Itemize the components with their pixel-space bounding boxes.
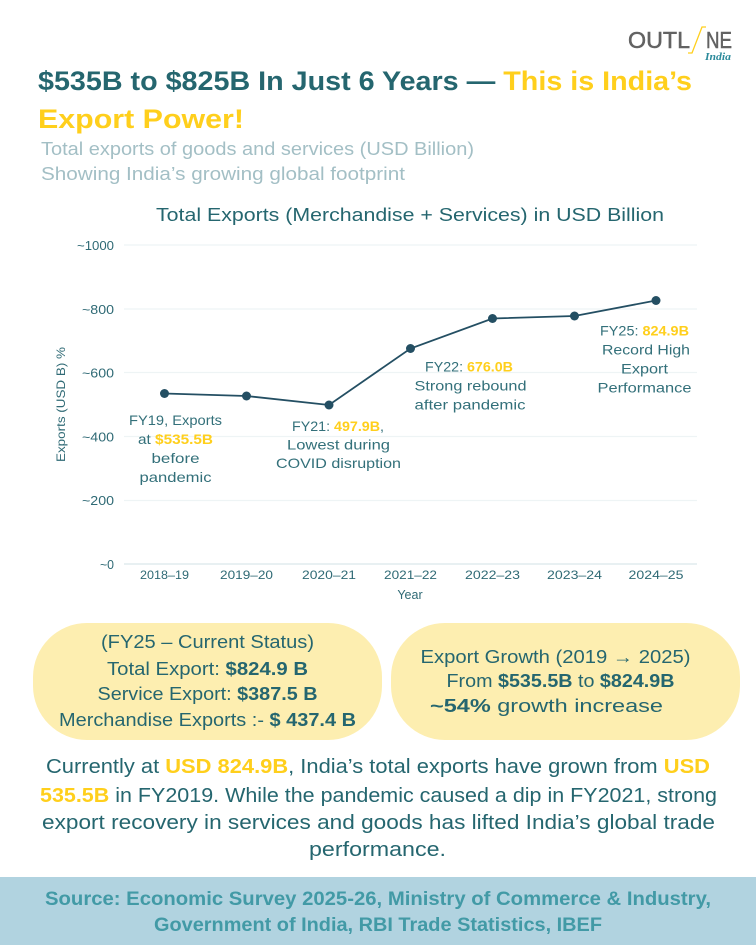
panel: FY25 current status bbox=[33, 623, 382, 740]
annotation: FY22: Strong rebound bbox=[414, 378, 526, 394]
panel: FY25 current status: Service Export: $387.5 B bbox=[98, 684, 318, 704]
x axis labels: 2021–22 bbox=[384, 568, 437, 582]
panel: export growth: Export Growth (2019 → 2025) bbox=[420, 647, 690, 667]
summary paragraph: performance. bbox=[309, 839, 446, 861]
panel: FY25 current status: Total Export: $824.9 B bbox=[107, 659, 308, 679]
annotation: FY22: after pandemic bbox=[414, 396, 526, 412]
annotation: FY21: COVID disruption bbox=[276, 455, 401, 471]
y axis labels: ~200 bbox=[82, 493, 114, 508]
summary paragraph: 535.5B in FY2019. While the pandemic caused a dip in FY2021, strong bbox=[40, 785, 717, 807]
chart title: Total Exports (Merchandise + Services) in USD Billion bbox=[156, 204, 664, 225]
subtitle: Showing India’s growing global footprint bbox=[41, 164, 405, 184]
title bbox=[38, 66, 692, 134]
x axis labels: 2023–24 bbox=[547, 568, 602, 582]
logo: Outline India bbox=[628, 27, 732, 63]
panel: FY25 current status: Merchandise Exports :- $ 437.4 B bbox=[59, 710, 356, 730]
panel: export growth: From $535.5B to $824.9B bbox=[446, 671, 674, 691]
panel: export growth: ~54% growth increase bbox=[430, 696, 663, 716]
data line bbox=[164, 300, 656, 405]
title: Export Power! bbox=[38, 104, 244, 134]
title: $535B to $825B In Just 6 Years — This is India’s bbox=[38, 66, 692, 96]
x axis labels: 2018–19 bbox=[140, 568, 189, 582]
y axis labels: ~800 bbox=[82, 302, 114, 317]
x axis labels: 2024–25 bbox=[628, 568, 684, 582]
x axis labels: 2020–21 bbox=[302, 568, 356, 582]
source footer: Government of India, RBI Trade Statistics, IBEF bbox=[154, 915, 602, 936]
x axis labels: 2022–23 bbox=[465, 568, 520, 582]
annotation: FY25 bbox=[598, 322, 692, 396]
annotation: FY22 bbox=[414, 358, 526, 412]
panel: FY25 current status: (FY25 – Current Status) bbox=[101, 632, 314, 652]
annotation: FY19: at $535.5B bbox=[138, 431, 213, 447]
subtitle: Total exports of goods and services (USD Billion) bbox=[41, 139, 474, 159]
line chart bbox=[54, 238, 697, 602]
annotation: FY25: Record High bbox=[602, 342, 690, 358]
y axis title: Exports (USD B) % bbox=[54, 347, 68, 462]
source footer bbox=[0, 877, 756, 945]
annotation: FY19 bbox=[129, 412, 222, 485]
annotation: FY21: FY21: 497.9B, bbox=[292, 418, 384, 434]
annotation: FY19: pandemic bbox=[140, 469, 212, 485]
summary paragraph: export recovery in services and goods has lifted India’s global trade bbox=[42, 812, 715, 834]
annotation: FY25: Export bbox=[621, 360, 668, 376]
annotation: FY21: Lowest during bbox=[287, 436, 390, 452]
annotation: FY25: Performance bbox=[598, 380, 692, 396]
logo: Outline India: India bbox=[704, 51, 732, 63]
source footer: Source: Economic Survey 2025-26, Ministry of Commerce & Industry, bbox=[45, 889, 711, 910]
annotation: FY25: FY25: 824.9B bbox=[600, 322, 689, 338]
y axis labels: ~1000 bbox=[77, 238, 114, 253]
y axis labels bbox=[77, 238, 114, 572]
y axis labels: ~400 bbox=[82, 430, 114, 444]
data points bbox=[160, 296, 660, 410]
summary paragraph: Currently at USD 824.9B , India’s total exports have grown from USD bbox=[46, 756, 710, 778]
x axis labels: 2019–20 bbox=[220, 568, 273, 582]
logo: Outline India: OUTL bbox=[628, 27, 690, 53]
summary paragraph bbox=[40, 756, 717, 861]
panel: export growth bbox=[391, 623, 740, 740]
subtitle bbox=[41, 139, 474, 184]
x axis labels bbox=[140, 568, 684, 582]
annotation: FY19: FY19, Exports bbox=[129, 412, 222, 428]
annotation: FY22: FY22: 676.0B bbox=[425, 358, 513, 374]
annotation: FY19: before bbox=[152, 450, 200, 466]
logo: Outline India: NE bbox=[706, 27, 732, 53]
x axis title: Year bbox=[397, 588, 423, 602]
annotation: FY21 bbox=[276, 418, 401, 471]
y axis labels: ~600 bbox=[82, 366, 114, 380]
y axis labels: ~0 bbox=[100, 557, 114, 572]
